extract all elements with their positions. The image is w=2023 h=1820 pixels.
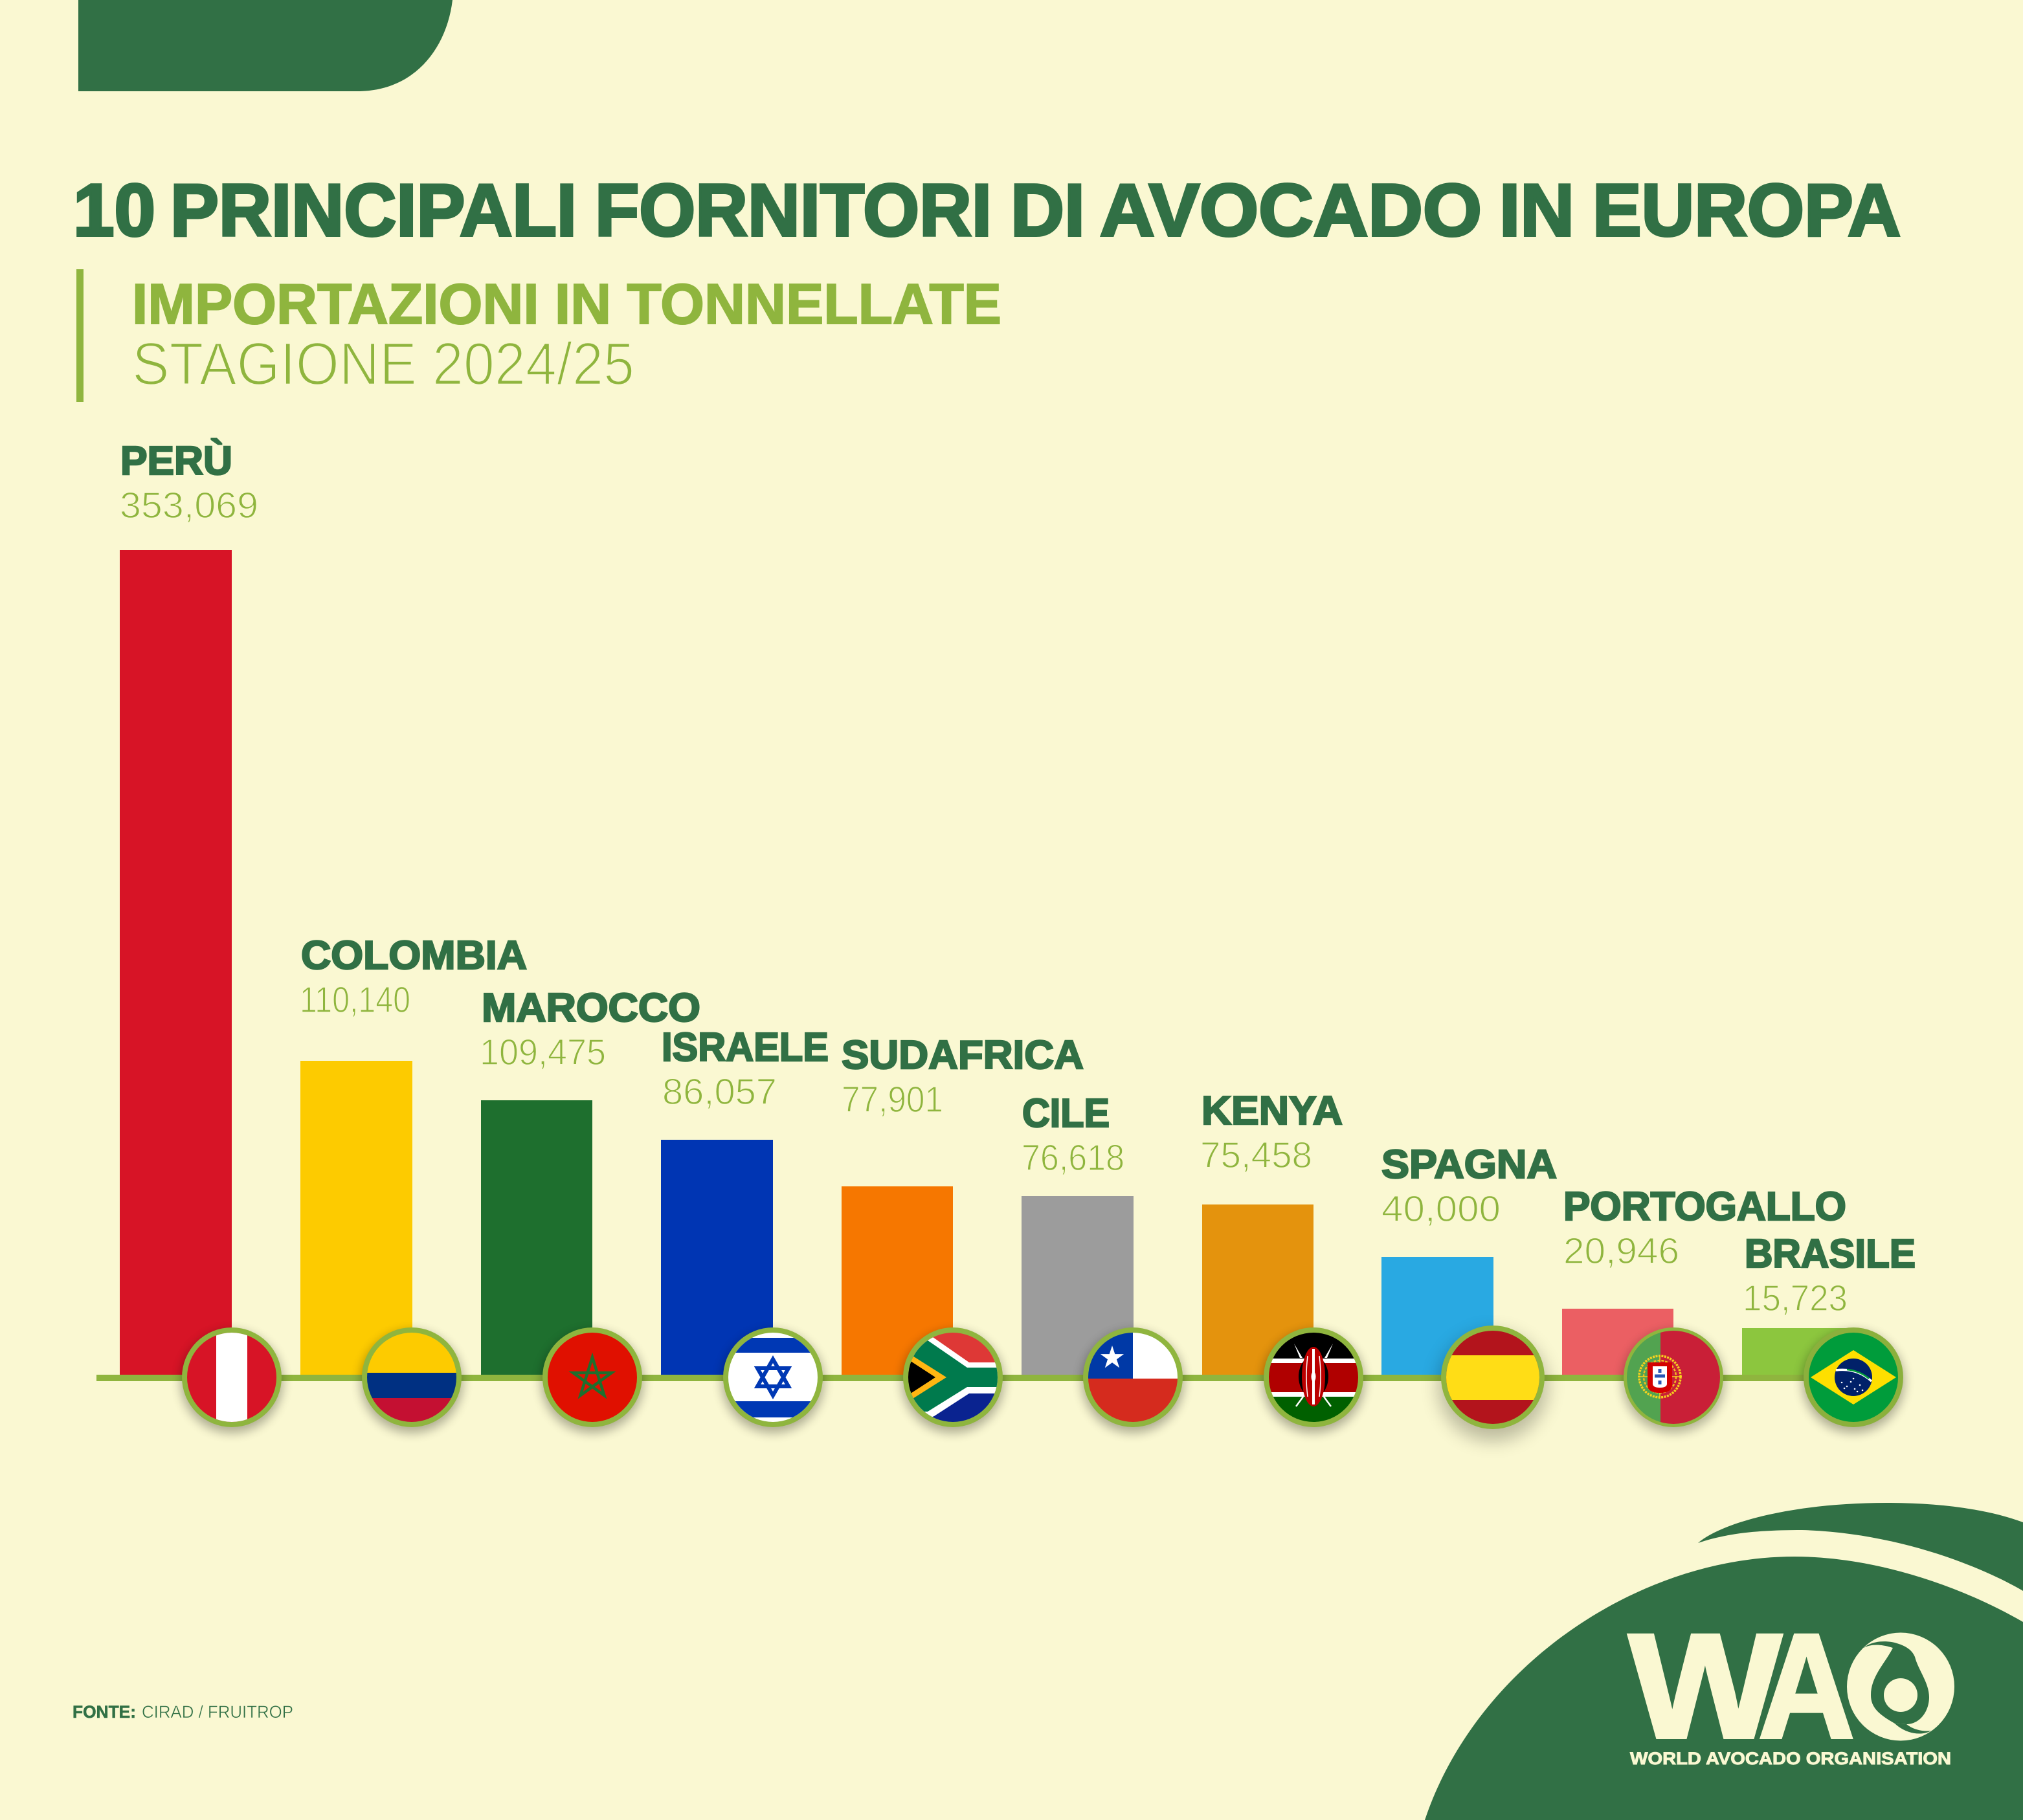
title: DI (1011, 170, 1085, 252)
label: Portogallo (1563, 1184, 1846, 1272)
label: Marocco: MAROCCO (482, 986, 700, 1030)
label: Cile (1022, 1091, 1124, 1179)
label: Sudafrica: SUDAFRICA (842, 1033, 1084, 1078)
label: Spagna (1381, 1142, 1557, 1230)
label: Kenya: KENYA (1202, 1089, 1343, 1133)
bar: Cile (1022, 1196, 1134, 1375)
bar chart (96, 550, 1857, 1381)
logo letter A: A (1758, 1603, 1855, 1770)
icon: flag of Portugal (1622, 1327, 1725, 1433)
label: Kenya (1200, 1089, 1343, 1176)
icon: flag of Israel (722, 1327, 824, 1433)
bar: Israele (661, 1140, 773, 1375)
title (73, 170, 1901, 252)
label: Cile: CILE (1022, 1091, 1110, 1136)
icon: flag of Colombia (361, 1327, 463, 1433)
icon: flag of Kenya (1262, 1327, 1365, 1433)
label: Perù: PERÙ (120, 439, 232, 483)
bar: Perù (120, 550, 232, 1375)
subtitle block (132, 272, 1001, 397)
label: Colombia (300, 933, 527, 1021)
label: Brasile: 15,723 (1743, 1278, 1848, 1319)
title: AVOCADO (1100, 170, 1482, 252)
bar: Colombia (300, 1061, 412, 1375)
label: Israele (662, 1025, 829, 1113)
source note: CIRAD / FRUITROP (142, 1702, 293, 1722)
label: Perù (120, 439, 258, 526)
icon: flag of South Africa (901, 1326, 1004, 1433)
icon: flag of Spain (1438, 1326, 1547, 1441)
label: Spagna: 40,000 (1381, 1188, 1501, 1230)
label: Cile: 76,618 (1022, 1137, 1124, 1179)
title: EUROPA (1593, 170, 1901, 252)
label: Brasile: BRASILE (1745, 1232, 1916, 1276)
subtitle: season: STAGIONE 2024/25 (132, 330, 634, 397)
title: PRINCIPALI (170, 170, 577, 252)
logo wordmark: WORLD AVOCADO ORGANISATION (1630, 1749, 1951, 1768)
bar: Brasile (1742, 1328, 1854, 1375)
chart baseline (96, 1375, 1857, 1381)
icon: flag of Brazil (1802, 1327, 1905, 1433)
label: Brasile (1743, 1232, 1916, 1319)
label: Marocco: 109,475 (480, 1032, 606, 1073)
label: Israele: ISRAELE (662, 1025, 829, 1070)
bar: Kenya (1202, 1204, 1313, 1375)
icon: avocado O (1847, 1632, 1954, 1741)
label: Perù: 353,069 (120, 485, 258, 526)
footer swoosh (1698, 1503, 2023, 1591)
label: Kenya: 75,458 (1200, 1135, 1312, 1176)
bar: Sudafrica (842, 1186, 953, 1375)
label: Sudafrica (842, 1033, 1084, 1120)
top decorative tab (78, 0, 453, 91)
icon: flag of Peru (181, 1327, 283, 1433)
subtitle: unit: IMPORTAZIONI IN TONNELLATE (132, 272, 1001, 336)
label: Colombia: 110,140 (300, 979, 410, 1021)
label: Sudafrica: 77,901 (842, 1079, 943, 1120)
icon: flag of Morocco (541, 1327, 643, 1433)
label: Colombia: COLOMBIA (301, 933, 527, 978)
bar: Spagna (1381, 1257, 1493, 1375)
label: Portogallo: PORTOGALLO (1563, 1184, 1846, 1229)
bar: Portogallo (1562, 1309, 1673, 1375)
source note: FONTE: (73, 1702, 136, 1722)
title: 10 (73, 170, 155, 252)
label: Spagna: SPAGNA (1381, 1142, 1557, 1187)
title: FORNITORI (595, 170, 992, 252)
source note (73, 1702, 293, 1722)
label: Marocco (480, 986, 700, 1073)
footer hill shape (1425, 1557, 2023, 1820)
logo: World Avocado Organisation (1629, 1603, 1954, 1770)
label: Israele: 86,057 (662, 1071, 777, 1113)
title: IN (1499, 170, 1574, 252)
logo letter W: W (1629, 1603, 1782, 1770)
bar: Marocco (481, 1100, 592, 1375)
icon: flag of Chile (1082, 1327, 1184, 1433)
subtitle accent bar (76, 269, 84, 402)
label: Portogallo: 20,946 (1563, 1230, 1679, 1272)
